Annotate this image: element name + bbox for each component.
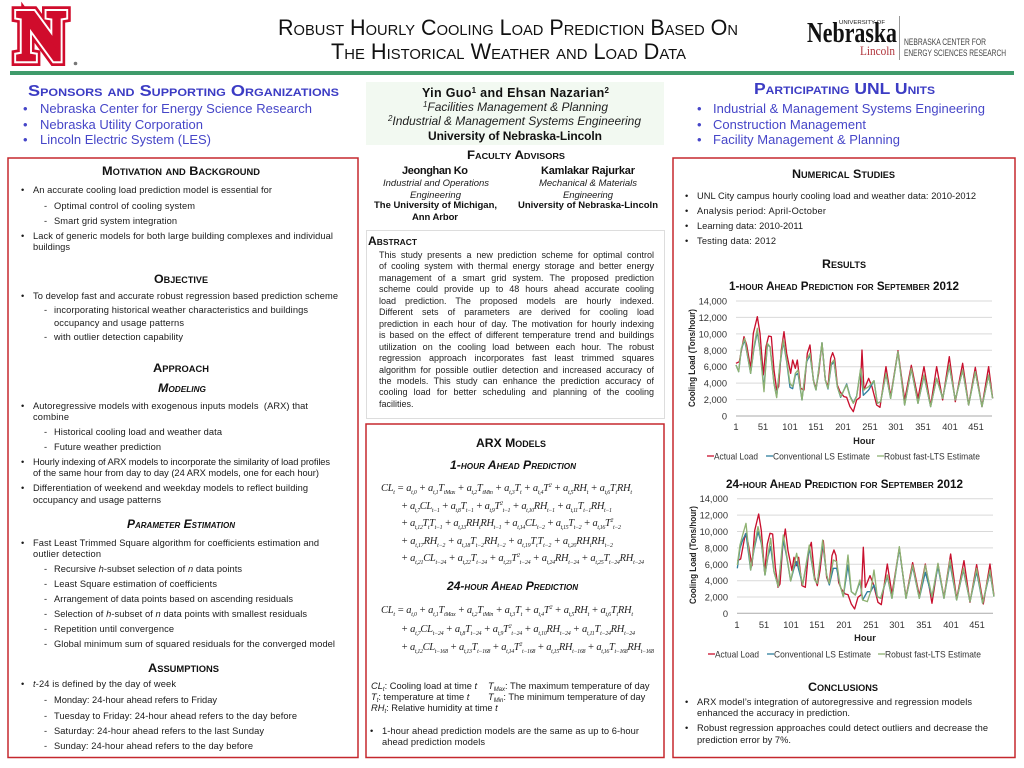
authors box: 1 (472, 86, 477, 95)
equation legend: T (488, 692, 495, 702)
green divider bar (10, 71, 1014, 75)
line chart: 24-hour ahead: 0 (723, 609, 728, 619)
faculty advisors (374, 150, 658, 223)
line chart: 24-hour ahead: 301 (889, 620, 905, 630)
modeling text: - (44, 427, 47, 437)
equation legend: T (488, 681, 495, 691)
parameter estimation text: - (44, 594, 47, 604)
heading: approach: Approach (153, 361, 209, 375)
abstract text: utilization on the cooling load between each hour. The robust (379, 342, 654, 352)
line chart: 24-hour ahead: 2,000 (705, 592, 728, 602)
line chart: 1-hour ahead: 351 (915, 422, 931, 432)
heading: abstract: Abstract (368, 236, 417, 248)
abstract text: regression approach incorporates fast least trimmed squares (379, 353, 654, 363)
line chart: 1-hour ahead: 4,000 (704, 378, 727, 388)
abstract text: algorithm for possible outlier detection and increased accuracy of (379, 365, 654, 375)
objective text: - (44, 332, 47, 342)
line chart: 24-hour ahead: 8,000 (705, 544, 728, 554)
line chart: 1-hour ahead: Hour (853, 436, 875, 446)
note: 1-hour models (370, 726, 639, 747)
parameter estimation text: Fast Least Trimmed Square algorithm for coefficients estimation and (33, 538, 319, 548)
parameter estimation text: Recursive h-subset selection of n data points (54, 564, 242, 574)
abstract text: This study presents a new prediction scheme for optimal control (379, 250, 654, 260)
faculty advisors: Engineering (410, 190, 462, 201)
modeling text: • (21, 483, 24, 493)
line chart: 24-hour ahead: 1 (734, 620, 740, 630)
participating units list: Facility Management & Planning (713, 132, 900, 147)
motivation text: • (21, 231, 24, 241)
line chart: 24-hour ahead: 451 (969, 620, 985, 630)
modeling text: Autoregressive models with exogenous inputs models (ARX) that (33, 401, 308, 411)
numerical studies text: UNL City campus hourly cooling load and weather data: 2010-2012 (697, 191, 976, 201)
authors box: 2 (605, 86, 610, 95)
numerical studies text: • (685, 206, 688, 216)
participating units list: Industrial & Management Systems Engineering (713, 101, 985, 116)
assumptions text: - (44, 741, 47, 751)
line chart: 24-hour ahead: 51 (759, 620, 769, 630)
line chart: 24-hour ahead: 6,000 (705, 560, 728, 570)
conclusions text (685, 697, 988, 745)
chart title: 24-hour: 24-hour Ahead Prediction for September 2012 (726, 479, 963, 491)
faculty advisors: Industrial and Operations (383, 178, 489, 189)
equation legend: t (474, 681, 477, 691)
line chart: 24-hour ahead: 351 (916, 620, 932, 630)
equation legend (371, 681, 650, 715)
numerical studies text: • (685, 191, 688, 201)
line chart: 1-hour ahead: 14,000 (699, 296, 727, 306)
line chart: 24-hour ahead (688, 494, 994, 660)
logo: University of Nebraska-Lincoln, Nebraska Center for Energy Sciences Research (807, 16, 1006, 60)
heading: results: Results (822, 257, 866, 271)
chart legend: Actual Load (714, 452, 758, 462)
conclusions text: • (685, 697, 688, 707)
faculty advisors: Ann Arbor (412, 212, 458, 223)
objective text: occupancy and usage patterns (54, 318, 184, 328)
line chart: 24-hour ahead: Cooling Load (Tons/hour) (688, 506, 698, 604)
motivation text: An accurate cooling load prediction model is essential for (33, 185, 272, 195)
equations: 24-hour: + at,7CLt−24 + at,8Tt−24 + at,9T2 t−24 + at,10RHt−24 + at,11Tt−24RHt−24 (401, 624, 635, 636)
abstract text: the models. This study can enhance the prediction accuracy of (379, 376, 654, 386)
equations: 1-hour: + at,17RHt−2 + at,18Tt−2RHt−2 + at,19TtTt−2 + at,20RHtRHt−2 (401, 536, 613, 548)
title: The Historical Weather and Load Data (331, 39, 686, 64)
parameter estimation text: - (44, 624, 47, 634)
equation legend: t (377, 698, 379, 704)
sponsors list: Nebraska Center for Energy Science Research (40, 101, 312, 116)
chart legend (708, 650, 981, 660)
motivation text: Optimal control of cooling system (54, 201, 195, 211)
chart legend: Actual Load (715, 650, 759, 660)
line chart: 1-hour ahead: 451 (968, 422, 984, 432)
heading: conclusions: Conclusions (808, 680, 878, 694)
modeling text (21, 401, 330, 505)
assumptions text: - (44, 711, 47, 721)
line chart: 24-hour ahead: 251 (863, 620, 879, 630)
sponsors list: • (23, 101, 28, 116)
abstract text: scheme could provide up to 48 hours ahead accurate cooling (379, 284, 654, 294)
sponsors list (23, 83, 339, 147)
panel: abstract (366, 230, 664, 418)
logo: University of Nebraska-Lincoln, Nebraska Center for Energy Sciences Research: NEBRASKA CENTER FOR (904, 37, 986, 48)
chart legend: Robust fast-LTS Estimate (884, 452, 980, 462)
modeling text: • (21, 457, 24, 467)
line chart: 1-hour ahead: 301 (888, 422, 904, 432)
faculty advisors: Mechanical & Materials (539, 178, 637, 189)
numerical studies text: • (685, 221, 688, 231)
line chart: 1-hour ahead: 6,000 (704, 362, 727, 372)
assumptions text: Monday: 24-hour ahead refers to Friday (54, 695, 217, 705)
line chart: 1-hour ahead: 12,000 (699, 313, 727, 323)
line chart: 1-hour ahead: 151 (808, 422, 824, 432)
chart legend: Conventional LS Estimate (774, 650, 871, 660)
numerical studies text: Testing data: 2012 (697, 236, 776, 246)
parameter estimation text: Global minimum sum of squared residuals for the converged model (54, 639, 335, 649)
numerical studies text: • (685, 236, 688, 246)
motivation text: Lack of generic models for both large building complexes and individual (33, 231, 333, 241)
subheading: modeling: Modeling (158, 381, 206, 395)
participating units list: • (697, 132, 702, 147)
sponsors list: Nebraska Utility Corporation (40, 117, 203, 132)
equations: 24-hour (381, 605, 654, 654)
authors box: Yin Guo (422, 86, 471, 100)
sponsors list: Lincoln Electric System (LES) (40, 132, 211, 147)
heading: motivation and background: Motivation and Background (102, 164, 261, 178)
faculty advisors: The University of Michigan, (374, 200, 497, 211)
authors box: Industrial & Management Systems Engineering (392, 114, 641, 128)
motivation text: - (44, 201, 47, 211)
equations: 1-hour: + at,12TtTt−1 + at,13RHtRHt−1 + at,14CLt−2 + at,15Tt−2 + at,16T2 t−2 (401, 518, 621, 530)
authors box: 1 (423, 100, 427, 109)
chart legend (707, 452, 980, 462)
parameter estimation text: Selection of h-subset of n data points with smallest residuals (54, 609, 307, 619)
motivation text: - (44, 216, 47, 226)
authors box (366, 82, 664, 145)
modeling text: Differentiation of weekend and weekday models to reflect building (33, 483, 308, 493)
line chart: 24-hour ahead: 201 (836, 620, 852, 630)
numerical studies text: Learning data: 2010-2011 (697, 221, 803, 231)
abstract text: cooling load for better scheduling and planning of the cooling (379, 387, 654, 397)
abstract text: load prediction. The proposed models are hourly indexed. (379, 296, 654, 306)
equation legend: t (467, 692, 470, 702)
line chart: 1-hour ahead: 0 (722, 412, 727, 422)
panel: motivation, objective, approach, assumptions (8, 158, 358, 758)
authors box: Facilities Management & Planning (427, 100, 608, 114)
heading: objective: Objective (154, 272, 208, 286)
chart title: 1-hour: 1-hour Ahead Prediction for September 2012 (729, 281, 959, 293)
line chart: 1-hour ahead: 101 (782, 422, 798, 432)
modeling text: • (21, 401, 24, 411)
heading: assumptions: Assumptions (148, 661, 219, 675)
faculty advisors: University of Nebraska-Lincoln (518, 200, 658, 211)
assumptions text (21, 679, 297, 751)
equations: 1-hour: + at,7CLt−1 + at,8Tt−1 + at,9T2 t−1 + at,10RHt−1 + at,11Tt−1RHt−1 (401, 501, 612, 514)
line chart: 1-hour ahead: 201 (835, 422, 851, 432)
assumptions text: Saturday: 24-hour ahead refers to the last Sunday (54, 726, 264, 736)
panel: ARX models (366, 424, 664, 758)
faculty advisors: Jeonghan Ko (402, 165, 468, 177)
motivation text (21, 185, 333, 252)
abstract text: facilities. (379, 399, 414, 409)
participating units list: Participating UNL Units (754, 81, 935, 98)
equation legend: : Relative humidity at time (386, 703, 495, 713)
icon: Nebraska N logo: N (17, 0, 65, 75)
equations: 1-hour: + at,21CLt−24 + at,22Tt−24 + at,23T2 t−24 + at,24RHt−24 + at,25Tt−24RHt−24 (401, 553, 644, 566)
line chart: 1-hour ahead: 251 (862, 422, 878, 432)
authors box: 2 (387, 114, 393, 123)
equation legend: RH (371, 703, 385, 713)
parameter estimation text: - (44, 609, 47, 619)
modeling text: - (44, 442, 47, 452)
sponsors list: • (23, 132, 28, 147)
conclusions text: enhanced the accuracy in prediction. (697, 708, 850, 718)
parameter estimation text: Repetition until convergence (54, 624, 174, 634)
line chart: 24-hour ahead: 10,000 (700, 527, 728, 537)
sponsors list: • (23, 117, 28, 132)
assumptions text: t-24 is defined by the day of week (33, 679, 176, 689)
line chart: 1-hour ahead: 2,000 (704, 395, 727, 405)
equation legend: : The maximum temperature of day (505, 681, 650, 691)
equation legend: CL (371, 681, 383, 691)
assumptions text: • (21, 679, 24, 689)
line chart: 24-hour ahead: 12,000 (700, 510, 728, 520)
line chart: 24-hour ahead: 151 (809, 620, 825, 630)
abstract text: prediction in each hour of day. The motivation for hourly indexing (379, 319, 654, 329)
participating units list: • (697, 117, 702, 132)
objective text: - (44, 305, 47, 315)
objective text (21, 291, 338, 342)
modeling text: of the same hour from day to day (24 ARX models, one for each hour) (33, 468, 319, 478)
heading: numerical studies: Numerical Studies (792, 167, 895, 181)
equation legend: t (383, 687, 385, 693)
logo: University of Nebraska-Lincoln, Nebraska Center for Energy Sciences Research: UNIVERSITY OF (839, 20, 886, 26)
modeling text: occupancy and usage patterns (33, 495, 161, 505)
icon: Nebraska N logo: N (17, 0, 65, 75)
chart legend: Robust fast-LTS Estimate (885, 650, 981, 660)
motivation text: Smart grid system integration (54, 216, 177, 226)
parameter estimation text: Arrangement of data points based on ascending residuals (54, 594, 293, 604)
line chart: 24-hour ahead: Hour (854, 633, 876, 643)
equation legend: t (495, 703, 498, 713)
line chart: 1-hour ahead: Cooling Load (Tons/hour) (687, 309, 697, 407)
conclusions text: prediction error by 7%. (697, 735, 791, 745)
objective text: • (21, 291, 24, 301)
participating units list: Construction Management (713, 117, 866, 132)
equation legend: Min (494, 698, 504, 704)
equation legend: : The minimum temperature of day (503, 692, 646, 702)
equation legend: t (384, 709, 386, 715)
line chart: 1-hour ahead: 10,000 (699, 330, 727, 340)
line chart: 1-hour ahead: 8,000 (704, 346, 727, 356)
assumptions text: Sunday: 24-hour ahead refers to the day before (54, 741, 253, 751)
logo: University of Nebraska-Lincoln, Nebraska Center for Energy Sciences Research: Nebraska (807, 18, 897, 49)
equations: 1-hour: CLt = at,0 + at,1TtMax + at,2TtMin + at,3Tt + at,4T2 + at,5RHt + at,6TtRHt (381, 483, 632, 496)
conclusions text: • (685, 723, 688, 733)
line chart: 1-hour ahead: 51 (758, 422, 768, 432)
equation legend: : Cooling load at time (385, 681, 474, 691)
note: 1-hour models: 1-hour ahead prediction models are the same as up to 6-hour (382, 726, 639, 736)
parameter estimation text: - (44, 579, 47, 589)
conclusions text: ARX model’s integration of autoregressive and regression models (697, 697, 972, 707)
note: 1-hour models: ahead prediction models (382, 737, 485, 747)
modeling text: Hourly indexing of ARX models to incorporate the similarity of load profiles (33, 457, 330, 467)
subheading: 1-hour ahead prediction: 1-hour Ahead Prediction (450, 458, 576, 472)
parameter estimation text: • (21, 538, 24, 548)
numerical studies text (685, 191, 976, 246)
line chart: 1-hour ahead: 401 (942, 422, 958, 432)
faculty advisors: Engineering (563, 190, 614, 201)
assumptions text: - (44, 695, 47, 705)
equation legend: T (371, 692, 378, 702)
equation legend: Max (494, 687, 506, 693)
motivation text: • (21, 185, 24, 195)
participating units list: • (697, 101, 702, 116)
objective text: incorporating historical weather characteristics and buildings (54, 305, 308, 315)
equations: 24-hour: CLt = at,0 + at,1TtMax + at,2TtMin + at,3Tt + at,4T2 + at,5RHt + at,6TtRHt (381, 605, 633, 618)
line chart: 1-hour ahead: 1 (733, 422, 739, 432)
authors box: University of Nebraska-Lincoln (428, 129, 602, 143)
abstract text: of cooling system with thermal energy storage and better energy (379, 261, 654, 271)
chart legend: Conventional LS Estimate (773, 452, 870, 462)
motivation text: buildings (33, 242, 70, 252)
heading: ARX models: ARX Models (476, 436, 546, 450)
equations: 1-hour (381, 483, 644, 566)
line chart: 24-hour ahead: 401 (943, 620, 959, 630)
authors box: and Ehsan Nazarian (476, 86, 604, 100)
faculty advisors: Faculty Advisors (467, 150, 566, 162)
equations: 24-hour: + at,12CLt−168 + at,13Tt−168 + at,14T2 t−168 + at,15RHt−168 + at,16Tt−168RHt−168 (401, 642, 654, 654)
line chart: 1-hour ahead (687, 296, 993, 462)
logo: University of Nebraska-Lincoln, Nebraska Center for Energy Sciences Research: Lincoln (860, 43, 895, 58)
abstract text: Different sets of parameters are derived for cooling load (379, 307, 654, 317)
numerical studies text: Analysis period: April-October (697, 206, 826, 216)
conclusions text: Robust regression approaches could detect outliers and decrease the (697, 723, 988, 733)
panel: numerical studies, results, conclusions (673, 158, 1015, 758)
note: 1-hour models: • (370, 726, 373, 736)
faculty advisors: Kamlakar Rajurkar (541, 165, 636, 177)
sponsors list: Sponsors and Supporting Organizations (28, 83, 339, 100)
modeling text: Historical cooling load and weather data (54, 427, 223, 437)
assumptions text: - (44, 726, 47, 736)
abstract text: management of a smart grid system. The proposed prediction (379, 273, 654, 283)
line chart: 24-hour ahead: 101 (783, 620, 799, 630)
participating units list (697, 81, 985, 147)
equation legend: : temperature at time (378, 692, 467, 702)
parameter estimation text: - (44, 639, 47, 649)
icon: Nebraska N logo: N (17, 0, 65, 75)
parameter estimation text: outlier detection (33, 549, 101, 559)
title (278, 15, 738, 64)
parameter estimation text: Least Square estimation of coefficients (54, 579, 217, 589)
objective text: with outlier detection capability (53, 332, 183, 342)
abstract text (379, 250, 654, 415)
objective text: To develop fast and accurate robust regression based prediction scheme (33, 291, 338, 301)
line chart: 24-hour ahead: 14,000 (700, 494, 728, 504)
subheading: 24-hour ahead prediction: 24-hour Ahead Prediction (446, 579, 578, 593)
line chart: 24-hour ahead: 4,000 (705, 576, 728, 586)
title: Robust Hourly Cooling Load Prediction Based On (278, 15, 738, 40)
subheading: parameter estimation: Parameter Estimation (127, 517, 235, 531)
modeling text: Future weather prediction (54, 442, 161, 452)
abstract text: is based on the effect of different temperature trend and buildings (379, 330, 654, 340)
assumptions text: Tuesday to Friday: 24-hour ahead refers to the day before (54, 711, 297, 721)
parameter estimation text: - (44, 564, 47, 574)
parameter estimation text (21, 538, 335, 649)
modeling text: combine (33, 412, 69, 422)
